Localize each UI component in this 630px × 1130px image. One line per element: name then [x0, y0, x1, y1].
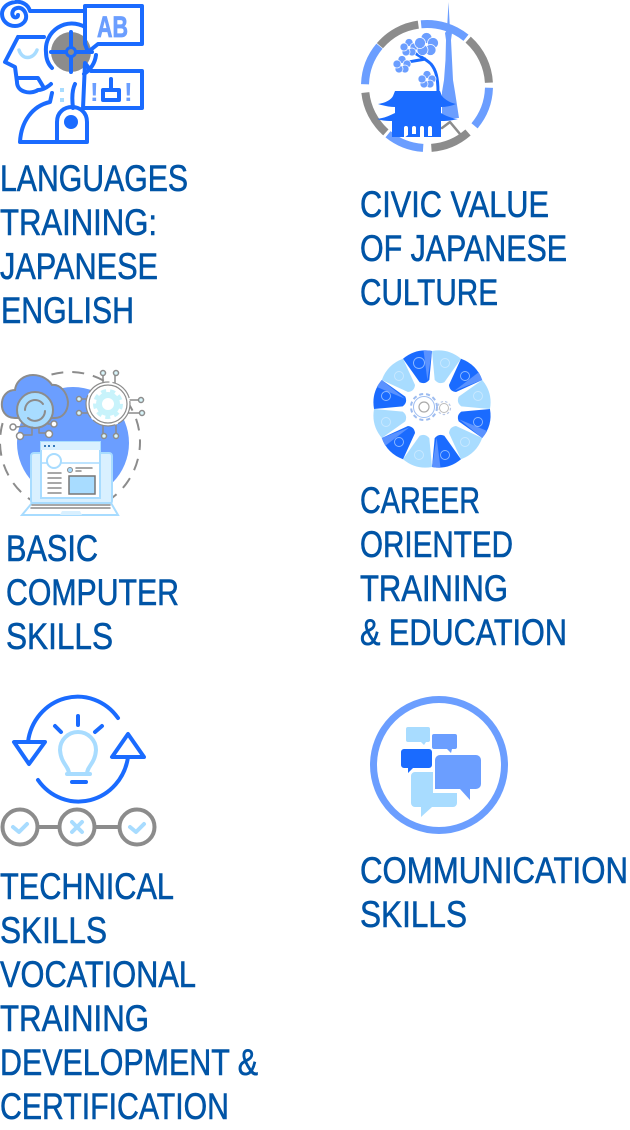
heading: technical skills: SKILLS — [0, 910, 107, 951]
heading: languages training: LANGUAGES — [0, 158, 188, 199]
heading: technical skills — [0, 866, 258, 1127]
icon: head with speech bubbles — [2, 2, 142, 142]
icon: light bulb cycle — [2, 697, 154, 844]
heading: basic computer skills: COMPUTER — [6, 572, 179, 613]
heading: technical skills: TRAINING — [0, 998, 149, 1039]
icon: career wheel — [371, 348, 493, 470]
heading: career oriented training: CAREER — [360, 480, 480, 521]
panel: career oriented training — [360, 348, 567, 653]
heading: languages training: JAPANESE — [0, 246, 158, 287]
heading: communication skills — [360, 850, 628, 935]
panel: civic value of Japanese culture — [339, 0, 567, 313]
icon: cloud, gear and laptop — [0, 370, 144, 515]
heading: basic computer skills: SKILLS — [6, 616, 113, 657]
icon: head with speech bubbles: AB — [97, 11, 128, 44]
heading: basic computer skills: BASIC — [6, 528, 98, 569]
heading: civic value: CIVIC VALUE — [360, 184, 549, 225]
heading: civic value — [360, 184, 567, 313]
icon: head with speech bubbles: ! — [124, 77, 133, 107]
panel: basic computer skills — [0, 370, 179, 657]
panel: languages training — [0, 2, 188, 331]
heading: languages training: ENGLISH — [1, 290, 134, 331]
icon: speech bubbles in circle — [374, 700, 504, 830]
heading: career oriented training: & EDUCATION — [360, 612, 567, 653]
heading: technical skills: DEVELOPMENT & — [0, 1042, 258, 1083]
heading: technical skills: CERTIFICATION — [0, 1086, 229, 1127]
heading: career oriented training — [360, 480, 567, 653]
heading: languages training — [0, 158, 188, 331]
heading: civic value: CULTURE — [360, 272, 498, 313]
heading: career oriented training: ORIENTED — [360, 524, 513, 565]
heading: civic value: OF JAPANESE — [360, 228, 567, 269]
heading: technical skills: VOCATIONAL — [0, 954, 196, 995]
heading: technical skills: TECHNICAL — [0, 866, 174, 907]
heading: communication skills: SKILLS — [360, 894, 467, 935]
heading: career oriented training: TRAINING — [360, 568, 508, 609]
panel: communication skills — [360, 700, 628, 935]
panel: technical skills — [0, 697, 258, 1127]
icon: temple, tower and blossom ring — [339, 0, 515, 174]
icon: head with speech bubbles: ! — [90, 77, 99, 107]
heading: languages training: TRAINING: — [0, 202, 157, 243]
heading: basic computer skills — [6, 528, 179, 657]
